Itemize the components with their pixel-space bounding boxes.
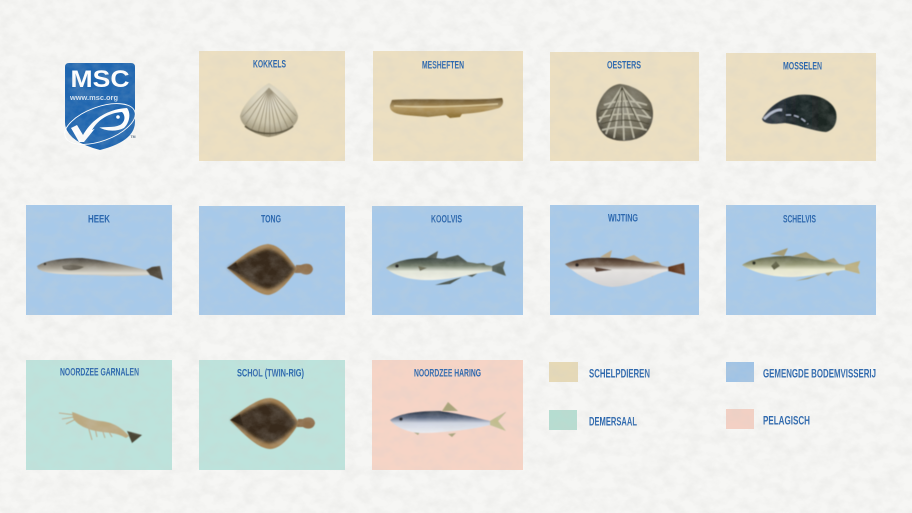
label: mesheften: MESHEFTEN xyxy=(422,60,464,72)
icon: haddock xyxy=(742,248,860,281)
icon: sole xyxy=(227,244,313,295)
legend: demersaal xyxy=(549,410,637,430)
logo: MSC xyxy=(59,63,141,153)
label: noordzee garnalen: NOORDZEE GARNALEN xyxy=(60,366,139,378)
panel: noordzee haring xyxy=(372,360,523,470)
logo: MSC: TM xyxy=(130,135,136,139)
legend: demersaal: DEMERSAAL xyxy=(589,414,637,428)
label: mosselen: MOSSELEN xyxy=(783,60,822,72)
panel: tong xyxy=(199,206,345,315)
icon: razor clam xyxy=(390,98,503,118)
label: schol: SCHOL (TWIN-RIG) xyxy=(237,368,304,380)
legend: gemengde bodemvisserij xyxy=(726,362,876,382)
logo: MSC: MSC xyxy=(70,66,130,93)
panel: mosselen xyxy=(726,53,876,161)
legend: pelagisch: PELAGISCH xyxy=(763,414,810,428)
panel: kokkels xyxy=(199,51,345,161)
icon: whiting xyxy=(565,250,685,287)
panel: noordzee garnalen xyxy=(26,360,172,470)
legend: schelpdieren xyxy=(549,362,650,382)
label: oesters: OESTERS xyxy=(607,60,641,72)
icon: mussel xyxy=(762,95,837,132)
panel: schol xyxy=(199,360,345,470)
label: heek: HEEK xyxy=(88,214,110,226)
logo: MSC: www.msc.org xyxy=(69,95,118,102)
panel: koolvis xyxy=(372,206,523,315)
panel: wijting xyxy=(550,205,699,315)
panel: oesters xyxy=(550,52,699,161)
icon: oyster xyxy=(596,84,653,141)
label: wijting: WIJTING xyxy=(608,212,638,224)
label: koolvis: KOOLVIS xyxy=(431,214,462,226)
icon: herring xyxy=(390,402,506,437)
label: kokkels: KOKKELS xyxy=(253,58,286,70)
label: tong: TONG xyxy=(261,214,281,226)
label: schelvis: SCHELVIS xyxy=(783,214,816,226)
icon: plaice xyxy=(230,398,315,449)
icon: cockle shell xyxy=(240,83,298,137)
label: noordzee haring: NOORDZEE HARING xyxy=(414,368,481,380)
icon: hake xyxy=(37,258,163,280)
panel: schelvis xyxy=(726,205,876,315)
legend: pelagisch xyxy=(726,409,810,429)
icon: shrimp xyxy=(59,412,142,443)
icon: pollock xyxy=(386,251,506,285)
panel: heek xyxy=(26,205,172,315)
legend: schelpdieren: SCHELPDIEREN xyxy=(589,366,650,380)
panel: mesheften xyxy=(373,51,523,161)
